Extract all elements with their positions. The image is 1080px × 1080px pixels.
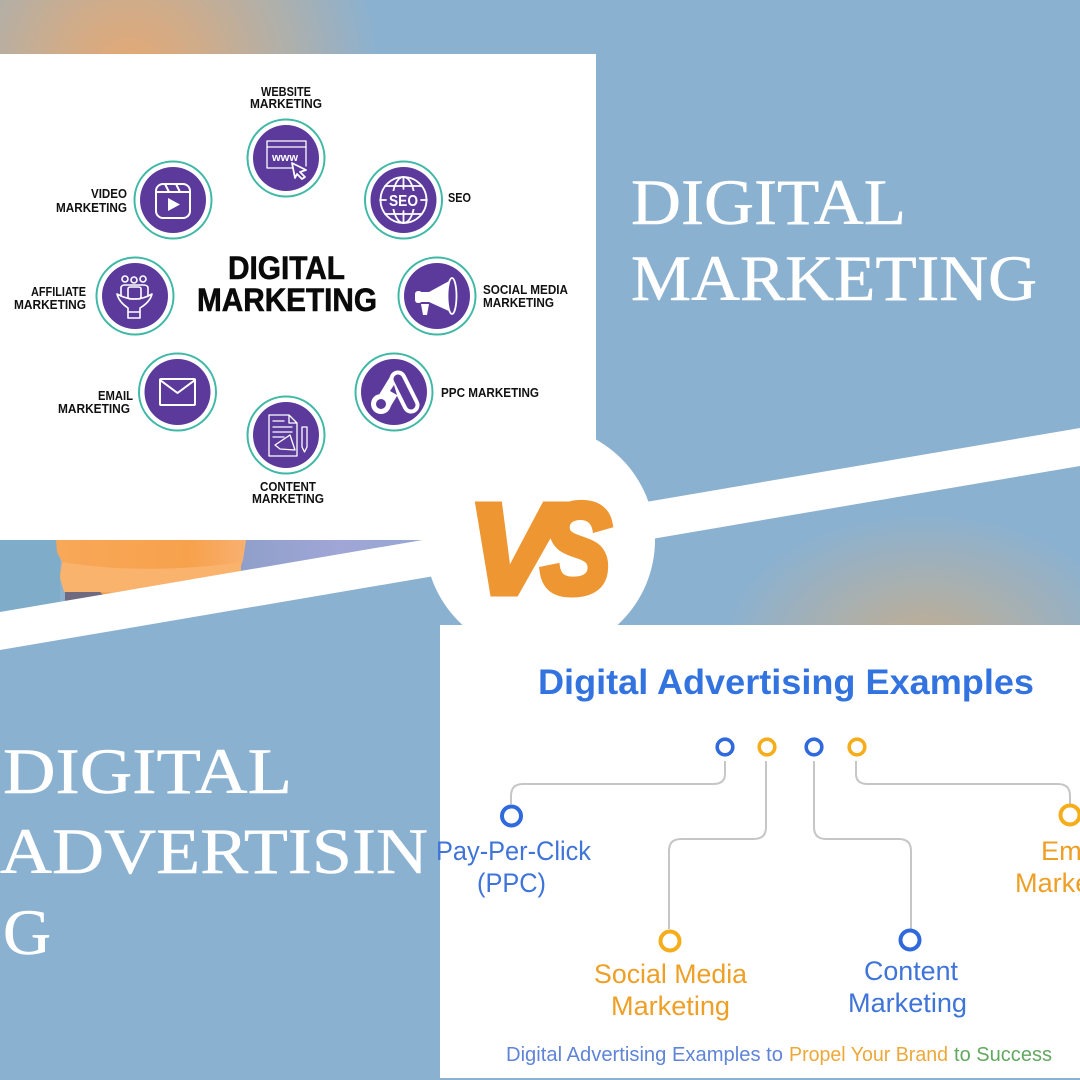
node: seo [365, 162, 471, 238]
node: seo: SEO [389, 193, 418, 210]
title: digital marketing: MARKETING [631, 243, 1037, 315]
node: video marketing: MARKETING [56, 200, 127, 215]
title: digital marketing [631, 167, 1037, 315]
panel: digital advertising examples [436, 625, 1080, 1078]
title: digital advertising [0, 736, 428, 969]
node: seo: SEO [448, 190, 471, 205]
item: pay-per-click [436, 806, 591, 898]
node: website marketing: MARKETING [250, 96, 322, 111]
footer tagline [506, 1044, 1052, 1066]
item: email marketing [1015, 806, 1080, 898]
center heading [197, 250, 377, 318]
title: digital advertising: DIGITAL [3, 736, 292, 808]
node: email marketing: MARKETING [58, 401, 130, 416]
node: affiliate marketing: AFFILIATE [31, 284, 86, 299]
center heading: MARKETING [197, 282, 377, 318]
footer tagline: Propel Your Brand [789, 1044, 948, 1066]
node: ppc marketing: PPC MARKETING [441, 385, 539, 400]
node: website marketing: www [271, 152, 298, 164]
node: content marketing: CONTENT [260, 479, 316, 494]
item: content marketing: Marketing [848, 988, 967, 1018]
panel: digital marketing [0, 54, 596, 540]
node: ppc marketing [356, 354, 539, 430]
vs badge: V [468, 478, 566, 621]
node: website marketing [248, 84, 324, 196]
node: social media marketing: MARKETING [483, 295, 554, 310]
diagonal white band [0, 428, 1080, 650]
vs badge [425, 425, 655, 655]
item: social media marketing: Marketing [611, 991, 730, 1021]
node: website marketing: WEBSITE [261, 84, 311, 99]
title: digital advertising: G [3, 897, 51, 969]
vs badge: S [541, 478, 611, 621]
node: affiliate marketing [14, 258, 174, 334]
item: content marketing: Content [864, 956, 958, 986]
footer tagline: to Success [954, 1044, 1052, 1066]
center heading: DIGITAL [228, 250, 345, 286]
title: digital marketing: DIGITAL [631, 167, 906, 239]
node: content marketing [248, 396, 324, 506]
node: social media marketing [398, 258, 569, 334]
connector lines [511, 761, 1070, 929]
item: social media marketing [594, 932, 748, 1021]
node: video marketing [56, 162, 212, 238]
top dots [717, 739, 865, 755]
item: pay-per-click: (PPC) [477, 868, 546, 898]
bottle graphic [0, 540, 420, 612]
item: social media marketing: Social Media [594, 959, 748, 989]
node: content marketing: MARKETING [252, 491, 324, 506]
node: email marketing [58, 354, 216, 430]
node: video marketing: VIDEO [91, 186, 127, 201]
footer tagline: Digital Advertising Examples to [506, 1044, 783, 1066]
node: social media marketing: SOCIAL MEDIA [483, 282, 569, 297]
panel heading: Digital Advertising Examples [538, 663, 1034, 702]
item: pay-per-click: Pay-Per-Click [436, 836, 591, 866]
node: affiliate marketing: MARKETING [14, 297, 86, 312]
title: digital advertising: ADVERTISIN [0, 816, 428, 888]
item: content marketing [848, 930, 967, 1018]
node: email marketing: EMAIL [98, 388, 133, 403]
